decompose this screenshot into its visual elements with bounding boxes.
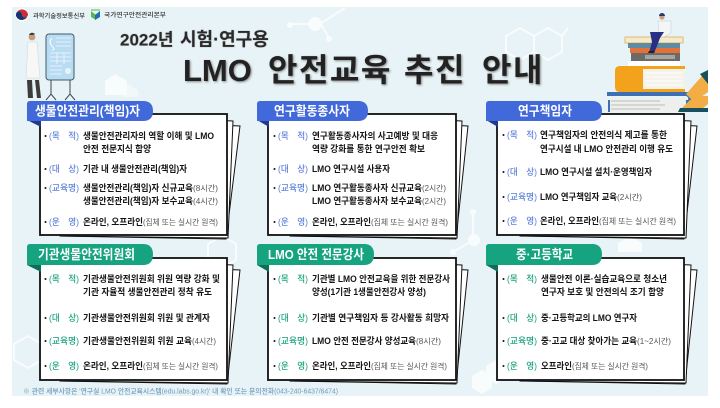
main title: 안내: [482, 52, 544, 88]
details: (집체 또는 실시간 원격): [371, 361, 447, 371]
details: 중·고교 대상 찾아가는 교육: [541, 335, 637, 346]
details: 연구책임자의 안전의식 제고를 통한: [540, 129, 668, 140]
details: (대 상): [49, 312, 79, 323]
details: LMO 연구활동종사자 보수교육: [312, 195, 422, 206]
details: [44, 273, 220, 371]
details: [44, 130, 218, 227]
sheet body: [497, 114, 684, 235]
details: (대 상): [507, 166, 537, 177]
panel: 연구활동종사자: [257, 101, 468, 239]
details: (대 상): [49, 163, 79, 174]
details: 기관생물안전위원회 위원 및 관계자: [83, 312, 211, 323]
details: (2시간): [617, 192, 642, 202]
panel: 생물안전관리(책임)자: [27, 101, 240, 239]
details: (집체 또는 실시간 원격): [143, 361, 218, 371]
back sheets: [290, 114, 468, 239]
details: (운 영): [278, 217, 308, 227]
panel: 연구책임자: [486, 101, 697, 239]
details: (교육명): [278, 182, 308, 193]
details: (집체 또는 실시간 원격): [143, 217, 218, 227]
tab: 중·고등학교: [516, 247, 573, 262]
main title: LMO: [183, 53, 252, 88]
details: (2시간): [422, 183, 446, 193]
details: (4시간): [192, 336, 216, 346]
tab fold: [257, 265, 269, 272]
details: (목 적): [507, 273, 537, 284]
details: 중·고등학교의 LMO 연구자: [541, 312, 638, 323]
details: (교육명): [49, 335, 79, 346]
back sheets: [60, 114, 240, 239]
details: 생물안전관리(책임)자 신규교육: [83, 182, 193, 193]
tab: 기관생물안전위원회: [38, 247, 135, 262]
details: (4시간): [193, 196, 218, 206]
details: 연구자 보호 및 안전의식 조기 함양: [541, 286, 664, 297]
details: LMO 안전 전문강사 양성교육: [312, 335, 416, 346]
details: (8시간): [416, 336, 441, 346]
details: 생물안전관리자의 역할 이해 및 LMO: [83, 130, 214, 141]
panel: 기관생물안전위원회: [27, 244, 240, 384]
tab: [257, 101, 368, 121]
ministry logo: [16, 8, 85, 22]
details: [502, 273, 671, 371]
tab: [486, 101, 602, 121]
agency logo: 국가연구안전관리본부: [104, 11, 167, 19]
details: (대 상): [278, 163, 308, 174]
footer note: ※ 관련 세부사항은 '연구실 LMO 안전교육시스템(edu.labs.go.kr)' 내 확인 또는 문의전화(043-240-6437/6474): [23, 386, 338, 396]
illustration: books and reader: [607, 13, 708, 112]
illustration: scientist and board: [26, 33, 75, 100]
details: (교육명): [49, 182, 79, 193]
subtitle: 2022년: [120, 30, 173, 50]
details: (운 영): [507, 361, 537, 371]
details: [274, 130, 448, 227]
tab: [27, 101, 153, 121]
details: (교육명): [507, 191, 537, 202]
subtitle: 시험·연구용: [180, 30, 269, 50]
details: (목 적): [49, 130, 79, 141]
details: 온라인, 오프라인: [83, 361, 143, 371]
details: (목 적): [278, 273, 308, 284]
details: (운 영): [49, 217, 79, 227]
details: 온라인, 오프라인: [540, 216, 599, 226]
details: 역량 강화를 통한 연구안전 확보: [312, 143, 425, 154]
details: 생물안전 이론·실습교육으로 청소년: [541, 273, 667, 284]
details: (1~2시간): [637, 336, 671, 346]
details: 기관 내 생물안전관리(책임)자: [83, 163, 188, 174]
back sheets: [60, 258, 240, 384]
details: (운 영): [278, 361, 308, 371]
tab: LMO 안전 전문강사: [268, 247, 364, 262]
details: (교육명): [278, 335, 308, 346]
tab fold: [257, 120, 269, 127]
back sheets: [520, 114, 697, 239]
tab: [257, 244, 374, 265]
details: (목 적): [278, 130, 308, 141]
details: [274, 273, 451, 371]
tab: [27, 244, 153, 265]
sheet body: [497, 258, 684, 380]
panel: 중·고등학교: [486, 244, 697, 384]
tab fold: [27, 120, 41, 127]
details: (집체 또는 실시간 원격): [371, 217, 448, 227]
details: (대 상): [278, 312, 308, 323]
main title: 안전교육: [268, 52, 392, 88]
details: 오프라인: [541, 361, 572, 371]
details: LMO 연구책임자 교육: [540, 191, 617, 202]
tab fold: [486, 265, 498, 272]
details: LMO 연구시설 설치·운영책임자: [540, 166, 653, 177]
details: 양성(1기관 1생물안전강사 양성): [312, 286, 426, 297]
details: (목 적): [49, 273, 79, 284]
details: (운 영): [49, 361, 79, 371]
back sheets: [520, 258, 697, 384]
main title: 추진: [404, 52, 466, 88]
details: (2시간): [422, 196, 446, 206]
details: 연구활동종사자의 사고예방 및 대응: [312, 130, 438, 141]
details: (운 영): [507, 216, 537, 226]
details: 온라인, 오프라인: [312, 361, 371, 371]
details: 기관 자율적 생물안전관리 정착 유도: [83, 286, 212, 297]
tab: [486, 244, 602, 265]
ministry logo: 과학기술정보통신부: [33, 12, 85, 20]
sheet body: [268, 258, 456, 380]
details: 기관생물안전위원회 위원 교육: [83, 335, 192, 346]
details: 기관생물안전위원회 위원 역량 강화 및: [83, 273, 220, 284]
details: (목 적): [507, 129, 537, 140]
details: 온라인, 오프라인: [312, 217, 371, 227]
details: (8시간): [193, 183, 218, 193]
agency logo: [91, 10, 167, 20]
details: (대 상): [507, 312, 537, 323]
details: [502, 129, 676, 226]
details: 생물안전관리(책임)자 보수교육: [83, 195, 193, 206]
tab fold: [486, 120, 498, 127]
details: 안전 전문지식 함양: [83, 143, 151, 154]
panel: LMO 안전 전문강사: [257, 244, 468, 384]
details: (집체 또는 실시간 원격): [599, 216, 676, 226]
tab: 연구활동종사자: [274, 104, 350, 118]
sheet body: [268, 114, 456, 235]
details: 기관별 LMO 안전교육을 위한 전문강사: [312, 273, 451, 284]
details: LMO 연구시설 사용자: [312, 163, 391, 174]
details: 기관별 연구책임자 등 강사활동 희망자: [312, 312, 450, 323]
sheet body: [40, 258, 227, 380]
details: 온라인, 오프라인: [83, 217, 143, 227]
back sheets: [290, 258, 468, 384]
sheet body: [40, 114, 227, 235]
details: (교육명): [507, 335, 537, 346]
tab fold: [27, 265, 41, 272]
details: (집체 또는 실시간 원격): [572, 361, 648, 371]
tab: 생물안전관리(책임)자: [35, 104, 140, 118]
tab: 연구책임자: [518, 104, 572, 118]
details: LMO 연구활동종사자 신규교육: [312, 182, 422, 193]
details: 연구시설 내 LMO 안전관리 이행 유도: [540, 143, 673, 154]
